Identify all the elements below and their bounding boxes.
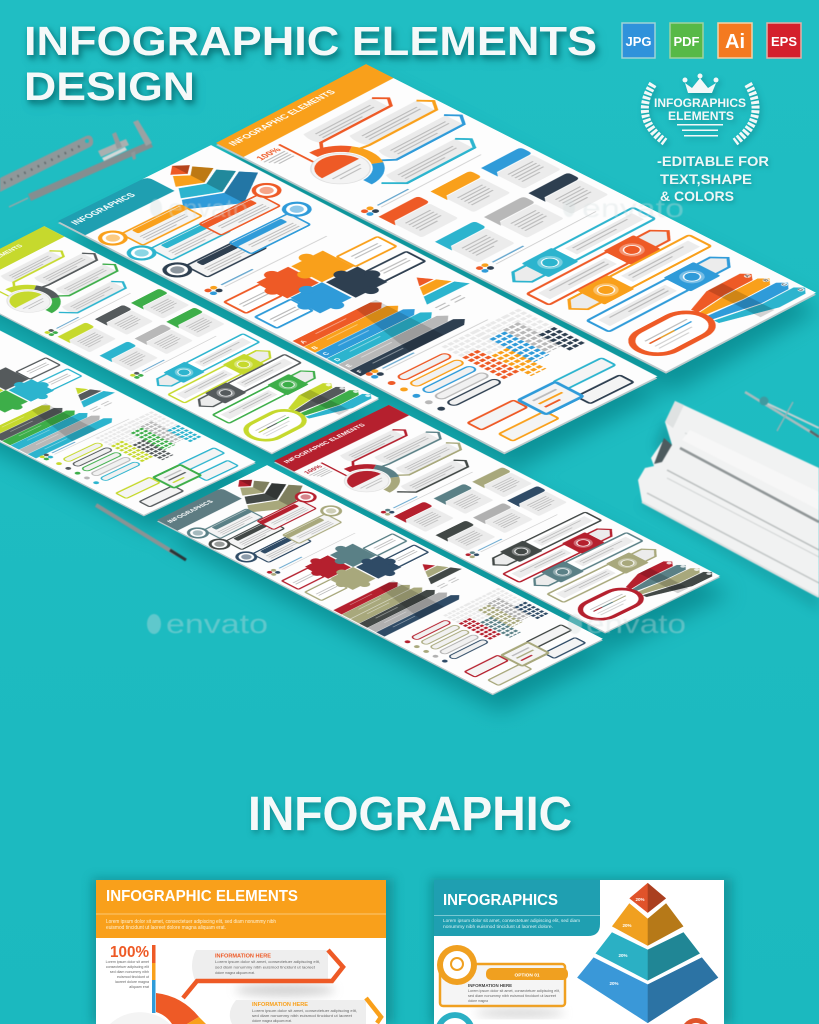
header — [0, 226, 65, 292]
card rule and intro: euismod tincidunt ut laoreet dolore magna aliquam erat. — [106, 925, 226, 931]
percent text: sed diam nonummy nibh — [110, 970, 149, 974]
badge: infographics elements: INFOGRAPHICS — [654, 96, 746, 110]
oval and bands — [235, 376, 375, 448]
info block two: Lorem ipsum dolor sit amet, consectetuer adipiscing elit, — [252, 1008, 357, 1013]
header title: INFOGRAPHICS — [166, 499, 216, 524]
percent text: euismod tincidunt ut — [117, 975, 149, 979]
pyramid — [135, 147, 281, 222]
icon: pen — [96, 505, 186, 560]
band letters: E — [344, 363, 354, 368]
banner rows — [480, 511, 667, 605]
card rule and intro — [96, 914, 386, 931]
option item — [437, 945, 568, 1006]
header title: INFOGRAPHICS — [69, 192, 138, 226]
card header — [96, 880, 386, 938]
band letters: D — [333, 357, 344, 363]
editable note — [657, 153, 769, 204]
percent text: aliquam erat — [129, 985, 149, 989]
option item: dolore magna — [468, 999, 489, 1003]
card percent: 100% — [110, 944, 149, 961]
card: infographic elements — [96, 880, 386, 1024]
format icons — [622, 23, 801, 58]
band letters — [299, 339, 366, 374]
format icons: PDF — [674, 34, 700, 49]
header — [274, 405, 409, 471]
card rule and intro — [434, 915, 600, 930]
band letters: A — [299, 339, 309, 345]
icon: ruler — [0, 136, 93, 192]
ribbon tags — [394, 465, 569, 553]
main title — [24, 18, 597, 109]
stacked bands — [293, 287, 470, 376]
band letters: F — [356, 369, 366, 374]
icon: compass — [745, 392, 819, 437]
card rule and intro: nonummy nibh euismod tincidunt ut laoreet dolore. — [443, 924, 553, 930]
brick grid — [97, 412, 205, 465]
watermarks: envato — [582, 193, 684, 223]
info block two: dolore magna aliquam erat. — [252, 1018, 292, 1023]
dot cluster lower — [129, 333, 219, 379]
percent text — [106, 960, 149, 989]
inner disc — [110, 1012, 170, 1024]
band letters: D — [797, 288, 806, 292]
dot cluster — [39, 416, 132, 461]
card page — [96, 880, 386, 1024]
watermarks — [147, 193, 686, 639]
sheet: orange elements — [214, 64, 818, 374]
ring chart — [302, 450, 407, 503]
header — [157, 488, 242, 531]
arrow rows — [0, 241, 143, 317]
percent text: consectetuer adipiscing elit — [106, 965, 149, 969]
small triangle — [407, 557, 470, 589]
info block two — [230, 998, 381, 1024]
card rule and intro: Lorem ipsum dolor sit amet, consectetuer adipiscing elit, sed diam — [443, 918, 580, 924]
card title: INFOGRAPHIC ELEMENTS — [106, 888, 298, 905]
shadow under option — [475, 1009, 565, 1017]
section heading: INFOGRAPHIC — [248, 788, 572, 841]
info block one — [183, 950, 343, 998]
puzzle — [215, 227, 433, 336]
header title: INFOGRAPHIC ELEMENTS — [283, 423, 368, 464]
band letters: C — [781, 282, 790, 287]
pyramid labels: 20% — [609, 981, 619, 986]
puzzle — [0, 350, 87, 429]
header — [216, 64, 394, 157]
dot cluster lower — [474, 208, 600, 273]
pyramid labels — [609, 897, 645, 986]
red circle — [684, 1018, 708, 1024]
pyramid — [212, 467, 320, 521]
brick grid — [443, 310, 589, 383]
sheet: lime diagram — [0, 290, 257, 516]
page — [272, 405, 722, 634]
brick grid — [444, 588, 552, 643]
format icons: JPG — [625, 34, 652, 49]
format icons: Ai — [725, 31, 745, 53]
card page — [434, 880, 724, 1024]
arrow rows — [294, 84, 500, 190]
card title: INFOGRAPHICS — [443, 892, 558, 909]
ring chart — [0, 271, 68, 323]
band letters: B — [762, 278, 771, 283]
page — [0, 226, 380, 454]
stacked bands — [333, 571, 463, 637]
pyramid labels: 20% — [635, 897, 645, 902]
info block one: Lorem ipsum dolor sit amet, consectetuer adipiscing elit, — [215, 959, 320, 964]
sheet: slate diagram — [156, 465, 604, 695]
band letters — [744, 267, 806, 299]
dot cluster lower — [364, 316, 491, 379]
teal circle — [437, 1012, 473, 1024]
ribbon tags — [378, 145, 612, 266]
frames and box — [116, 447, 244, 509]
page — [56, 145, 659, 454]
band letters: B — [310, 345, 321, 351]
option item: INFORMATION HERE — [468, 983, 512, 988]
shadow under arrow — [235, 984, 335, 996]
percent bar — [152, 945, 156, 1013]
editable note: TEXT,SHAPE — [660, 171, 752, 187]
dot cluster — [203, 232, 330, 296]
percent: 100% — [254, 146, 283, 162]
banner rows — [495, 206, 744, 335]
circle items — [182, 480, 360, 570]
frames and box — [467, 357, 641, 444]
dot cluster — [44, 291, 133, 336]
sheet: lime elements — [0, 226, 380, 454]
main title: INFOGRAPHIC ELEMENTS — [24, 18, 597, 64]
puzzle — [275, 526, 434, 606]
dot cluster lower — [464, 512, 560, 559]
page — [214, 64, 818, 374]
watermarks: envato — [586, 609, 686, 639]
stacked bands — [0, 394, 116, 458]
page — [156, 465, 604, 695]
editable note: & COLORS — [660, 188, 734, 204]
info block two: sed diam nonummy nibh euismod tincidunt ut laoreet — [252, 1013, 353, 1018]
watermarks: envato — [166, 609, 268, 639]
option item: Lorem ipsum dolor sit amet, consectetuer adipiscing elit, — [468, 989, 560, 993]
info block two: INFORMATION HERE — [252, 1002, 309, 1008]
sheet shadows — [0, 83, 819, 712]
ribbon tags — [58, 287, 227, 373]
oval and bands — [616, 264, 811, 365]
dot cluster — [360, 151, 484, 217]
ring chart — [254, 127, 395, 199]
pyramid labels: 20% — [622, 923, 632, 928]
small triangle — [395, 267, 481, 310]
card: infographics — [434, 880, 724, 1024]
sheet: teal diagram — [56, 145, 659, 454]
small triangle — [60, 380, 124, 412]
editable note: -EDITABLE FOR — [657, 153, 769, 169]
pill list — [385, 353, 502, 412]
option item: sed diam nonummy nibh euismod tincidunt ut laoreet — [468, 994, 556, 998]
sheet: red elements — [272, 405, 722, 634]
arrow rows — [333, 420, 487, 497]
frames and box — [465, 624, 591, 688]
percent text: Lorem ipsum dolor sit amet — [106, 960, 149, 964]
dot cluster — [380, 469, 475, 516]
header — [58, 177, 175, 235]
format icons: EPS — [771, 34, 797, 49]
band letters: A — [744, 274, 753, 279]
badge: infographics elements — [645, 74, 756, 142]
pyramid labels: 20% — [618, 953, 628, 958]
header title: INFOGRAPHIC ELEMENTS — [226, 89, 338, 147]
banner rows — [144, 332, 326, 426]
info block one: sed diam nonummy nibh euismod tincidunt ut laoreet — [215, 964, 316, 970]
card shadows — [92, 878, 732, 1024]
circle items — [92, 165, 334, 287]
percent: 100% — [303, 464, 325, 475]
pyramid — [577, 883, 718, 1023]
oval and bands — [569, 554, 716, 627]
info block one: INFORMATION HERE — [215, 954, 272, 960]
watermarks: envato — [168, 193, 248, 223]
card header — [434, 880, 600, 936]
badge: infographics elements: ELEMENTS — [668, 109, 734, 123]
main title: DESIGN — [24, 65, 195, 109]
pill list — [54, 442, 141, 485]
page — [0, 290, 257, 516]
dot cluster — [266, 530, 358, 576]
ring segments — [156, 993, 206, 1024]
card rule and intro: Lorem ipsum dolor sit amet, consectetuer adipiscing elit, sed diam nonummy nibh — [106, 919, 276, 925]
band letters: C — [322, 351, 332, 357]
icon: caliper — [9, 120, 153, 207]
icon: blueprint rolls — [638, 401, 819, 612]
info block one: dolore magna aliquam erat. — [215, 970, 255, 975]
pill list — [403, 620, 489, 664]
option item: OPTION 01 — [514, 972, 540, 978]
percent text: laoreet dolore magna — [115, 980, 149, 984]
